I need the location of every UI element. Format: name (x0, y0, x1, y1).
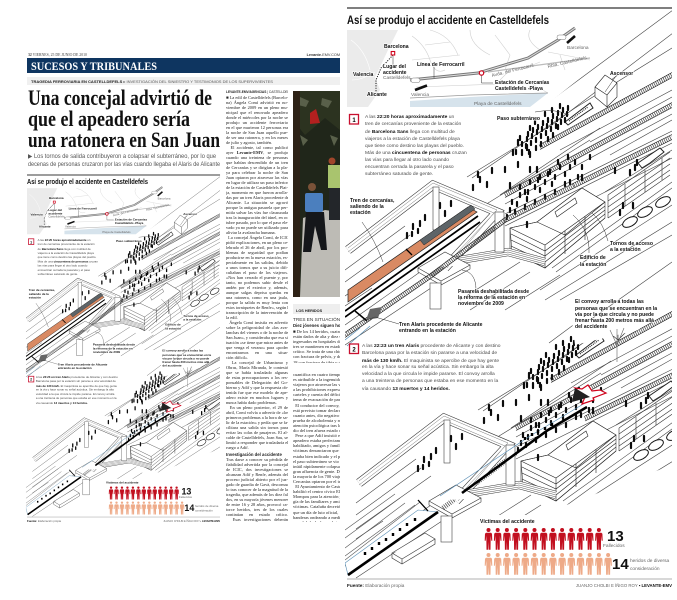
infographic, left small copy: Estación de Cercanías (115, 218, 147, 222)
article column 1: ayer Levante-EMV, se produjo (226, 150, 288, 155)
scene labels (350, 71, 653, 334)
infographic, left small copy: Tren de cercanías, (29, 288, 55, 292)
infographic, left small copy: velocidad a la que circula le impide pararse. El convoy arrolla (36, 392, 115, 396)
infographic, left small copy: Fuente: Elaboración propia (27, 519, 62, 523)
infographic, left small copy: accidente (48, 212, 63, 216)
infographic, left small copy: heridos de diversa (195, 504, 219, 508)
article column 1: donde el miércoles por la noche se (226, 115, 288, 120)
infographic, left small copy: encuentran cerrada la pasarela y el paso (38, 268, 91, 272)
article column 1: porque la salida es muy lenta con (226, 300, 288, 305)
step 1 text: que tiene como destino las playas del pueblo. (365, 143, 464, 149)
infographic, left small copy: de Barcelona Sans llega con multitud de (38, 247, 91, 251)
article column 1: tuación «se tiene que mirar antes de (226, 340, 288, 345)
infographic, left small copy: Lugar del (48, 208, 62, 212)
infographic, left small copy: entrando en la estación (58, 366, 92, 370)
infographic, left small copy: Tornos de acceso (183, 314, 209, 318)
headline: Una concejal advirtió de (28, 85, 212, 110)
headline: una ratonera en San Juan (28, 127, 220, 152)
article column 1: El accidente, tal como publicó (231, 145, 288, 150)
infographic, left small copy: noviembre de 2009 (93, 350, 120, 354)
infographic, left small copy: a la estación (183, 318, 201, 322)
article column 1: porque la antigua pasarela que per- (226, 205, 288, 210)
article column 1: nicipal que el renovado apeadero (226, 110, 288, 115)
sidebar: los heridos text (293, 317, 340, 363)
article column 1: tanto, no podemos subir desde el (226, 280, 288, 285)
infographic, left small copy: Pasarela deshabilitada desde (93, 343, 135, 347)
article column 1: que se había trasladado algunas (226, 370, 288, 375)
article column 1: La concejal de Urbanismo y (232, 360, 288, 365)
infographic, left small copy: Víctimas del accidente (106, 480, 139, 484)
infographic, left small copy: las vías para llegar al otro lado cuando (38, 264, 88, 268)
article column 1: Obras, María Miranda, le contestó (226, 365, 288, 370)
article column 1: lir de la estación» y pedía que se fa- (226, 420, 288, 425)
infographic, left small copy: Fallecidos (179, 495, 192, 499)
infographic, left small copy: la reforma de la estación en (93, 346, 133, 350)
article column 1: dos, en su mayoría jóvenes menores (226, 497, 288, 502)
article column 1: en lugar de utilizar un paso inferior (226, 180, 288, 185)
step 2 text: vía causando 13 muertos y 14 heridos. (362, 386, 450, 392)
article column 1: sobre la peligrosidad de «las ava- (226, 325, 288, 330)
section sub strip (27, 77, 340, 85)
callout: convoy: El convoy arrolla a todas las (575, 299, 644, 305)
street map labels: Estación de Cercanías (495, 80, 550, 86)
article column 1: torce heridos, tres de los cuales (226, 507, 288, 512)
photo: police officers at the station (293, 91, 340, 297)
newspaper name line: Levante-EMV.COM (307, 53, 340, 57)
source and credits: Fuente: Elaboración propia (347, 583, 405, 588)
infographic, left small copy: saliendo de la (29, 292, 49, 296)
step 2 text: A las 22:23 un tren Alaris procedente de Alicante y con destino (362, 343, 501, 349)
article column 2: el paso subterráneo se vio (293, 459, 339, 464)
infographic, left small copy: Playa de Castelldefels (102, 230, 131, 234)
scene labels: Paso subterráneo (497, 116, 540, 122)
article column 1: nunca había dado problemas. (226, 400, 277, 405)
street map labels: Rbla. Castelldefels (547, 55, 588, 70)
step 2 text: más de 130 km/h. El maquinista se apercibe de que hay gente (362, 358, 499, 364)
article column 1: pecialmente en las salidas, debido (226, 260, 288, 265)
infographic, left small copy: Rbla. Castelldefels (146, 202, 170, 212)
infographic, left small copy: 13 (181, 486, 191, 496)
article column 1: primeros problemas a la hora de sa- (226, 415, 288, 420)
locator map labels: accidente (383, 70, 407, 76)
article column 1: «Nos han cerrado el puente y, por (226, 275, 288, 280)
article column 1: viembre de 2009 en un pleno mu- (226, 105, 288, 110)
infographic, left small copy: 2 (30, 378, 32, 382)
scene labels: entrando en la estación (399, 328, 456, 334)
article column 1: ja, momento en que fueron arrolla- (226, 190, 288, 195)
newspaper page date line: 32 VIERNES, 25 DE JUNIO DE 2010 (28, 53, 87, 58)
scene labels: Pasarela deshabilitada desde (458, 289, 529, 295)
article column 1 (226, 90, 288, 522)
source and credits: JUANJO CHOLBI E ÍÑIGO ROY ▪ LEVANTE-EMV (576, 583, 672, 588)
article column 1: la edil. (226, 315, 238, 320)
street map labels: Castelldefels -Playa (495, 86, 543, 92)
street map labels: Playa de Castelldefels (474, 101, 522, 107)
article column 1: limitó a responder que trasladaría el (226, 440, 288, 445)
step 1 text: de Barcelona Sans llega con multitud de (365, 129, 455, 135)
infographic, left small copy: Tren Alaris procedente de Alicante (58, 362, 108, 366)
scene labels: Ascensor (610, 71, 633, 77)
scene labels: Edificio de (580, 255, 606, 261)
section banner (27, 58, 340, 73)
article column 1: ■ La edil de Castelldefels (Barcelo- (226, 95, 288, 100)
article column 1: de entre 16 y 28 años, provocó ca- (226, 502, 288, 507)
step 2 text: a una treintena de personas que estaba en ese momento en la (362, 378, 498, 384)
infographic, left small copy: Avda. del Ferrocarril (112, 207, 139, 217)
article column 1: lo tras conocer de la magnitud de la (226, 487, 288, 492)
infographic, left small copy: Valencia (31, 213, 43, 217)
infographic, left small copy: vía por la que circula y no puede (162, 356, 210, 360)
scene labels: Tren de cercanías, (350, 198, 395, 204)
infographic, left small copy: Ascensor (183, 212, 198, 216)
step 2 text: 2 (352, 348, 356, 354)
infographic, left small copy: Línea de Ferrocarril (69, 207, 97, 211)
sidebar strip: los heridos (293, 304, 340, 314)
article column 1: vado ya no puede ser utilizado para (226, 225, 288, 230)
graphic title, left copy: Así se produjo el accidente en Castelldefels (27, 179, 148, 186)
infographic, left small copy: Castelldefels (48, 215, 65, 219)
source and credits (347, 583, 672, 588)
scene labels: Tornos de acceso (610, 241, 653, 247)
victims legend: consideración (630, 566, 660, 572)
scene labels: noviembre de 2009 (458, 301, 504, 307)
street map labels: Valencia (411, 92, 429, 98)
article column 1: mitía salvar las vías fue clausurada (226, 210, 288, 215)
scene labels: Tren Alaris procedente de Alicante (399, 322, 483, 328)
callout: convoy: personas que se encuentran en la (575, 306, 657, 312)
victims legend (480, 519, 670, 573)
subheadline: decenas de personas cruzaron por las vías cuando llegaba el Alaris de Alicante (28, 161, 220, 168)
infographic, left small copy: tren de cercanías proveniente de la estación (38, 242, 95, 246)
step 1 text: tren de cercanías proveniente de la estación (365, 121, 462, 127)
article column 1: tras la inauguración del túnel, en oc- (226, 215, 288, 220)
victims legend: heridos de diversa (630, 558, 670, 564)
article column 1: encontrarnos en una situa- (226, 350, 288, 355)
article column 1: Esas investigaciones deberán (233, 517, 288, 522)
section sub strip: TRAGEDIA FERROVIARIA EN CASTELLDEFELS ▸ INVESTIGACIÓN DEL SINIESTRO Y TESTIMONIOS DE LOS SUPERVIVIENTES (31, 79, 273, 84)
article column 1: de la estación de Castelldefels Plat- (226, 185, 288, 190)
article column 1: que habían descendido de un tren (226, 160, 288, 165)
callout: convoy: vía por la que circula y no puede (575, 312, 654, 318)
infographic, left small copy: A las 22:23 un tren Alaris procedente de Alicante y con destino (36, 375, 118, 379)
article column 1: tubre pasado, por lo que el paso ele- (226, 220, 288, 225)
infographic, left small copy: Castelldefels -Playa (115, 221, 144, 225)
article column 1: En un pleno posterior, el 29 de (230, 405, 288, 410)
article column 1: fiabilidad advertida por la concejal (226, 462, 288, 467)
article column 1: de julio y agosto, también. (226, 140, 272, 145)
infographic, left small copy: Valencia (65, 225, 76, 229)
infographic, left small copy: a una treintena de personas que estaba en ese momento en la (36, 396, 117, 400)
street map labels: Línea de Ferrocarril (417, 62, 465, 68)
article column 2 (293, 372, 340, 522)
callout: convoy (575, 299, 657, 330)
article column 1: ción difícil». (226, 355, 248, 360)
step 1 text: subterráneo saturado de gente. (365, 171, 433, 177)
scene labels: saliendo de la (350, 204, 384, 210)
infographic, left small copy: 1 (30, 240, 32, 244)
article column 1: La concejal Ángela Comí, de ICIC, (228, 235, 288, 240)
infographic, left small copy: Más de una cincuentena de personas cruzan (38, 259, 98, 263)
scene labels: la reforma de la estación en (458, 295, 525, 301)
headline: que el apeadero sería (28, 106, 190, 131)
subheadline: ▶ Los tornos de salida contribuyeron a colapsar el subterráneo, por lo que (28, 153, 217, 160)
article column 1: de ICIC, dos investigaciones se (226, 467, 288, 472)
article column 1: en el que murieron 12 personas era (226, 125, 288, 130)
step 1 text: viajeros a la estación de Castelldefels playa (365, 136, 460, 142)
scene labels: estación (350, 210, 371, 216)
infographic, left small copy: estación (29, 295, 41, 299)
infographic, left small copy: Alicante (39, 225, 51, 229)
article column 1: de estas preocupaciones a los res- (226, 375, 288, 380)
article column 1: que venga el verano» para «poder (226, 345, 288, 350)
locator map labels (353, 44, 411, 98)
scene labels: la estación (580, 262, 606, 268)
infographic, left small copy: vía causando 13 muertos y 14 heridos. (36, 401, 88, 405)
step 2 text: Barcelona pasa por la estación sin pararse a una velocidad de (362, 350, 497, 356)
article column 1: aliviar la avalancha humana. (226, 230, 276, 235)
step 2 text: velocidad a la que circula le impide pararse. El convoy arrolla (362, 371, 495, 377)
victims legend: 14 (612, 556, 629, 573)
locator map labels: Valencia (353, 72, 374, 78)
street map labels: Avda. del Ferrocarril (491, 63, 534, 79)
article column 1: ya para celebrar la noche de San (226, 170, 288, 175)
step 1 text: 1 (352, 118, 356, 124)
graphic title, right: Así se produjo el accidente en Castelldefels (347, 14, 549, 27)
article column 1: a unos tornos que a su juicio difi- (226, 265, 288, 270)
article column 1: Investigación del accidente (226, 452, 282, 457)
article column 1: das por un tren Alaris procedente de (226, 195, 288, 200)
step 2 text: en la vía y hace sonar su señal acústica. Sin embargo la alta (362, 364, 494, 370)
step 1 text: encuentran cerrada la pasarela y el paso (365, 164, 454, 170)
locator map labels: Barcelona (384, 44, 409, 50)
infographic, left small copy: que tiene como destino las playas del pueblo. (38, 255, 96, 259)
subheadline (28, 153, 220, 168)
article column 2: víctimas. Cataluña decretó (293, 504, 340, 509)
callout: convoy: del accidente (575, 324, 607, 330)
victims legend: Víctimas del accidente (480, 519, 535, 525)
article column 1: tenida fue que ese modelo de ape- (226, 390, 288, 395)
article column 1: produjo un accidente ferroviario (226, 120, 288, 125)
infographic, left small copy: Barcelona (158, 197, 171, 201)
step 1 text (352, 114, 467, 177)
article column 1: Juan optaron por atravesar las vías (226, 175, 288, 180)
infographic, left small copy: del accidente (162, 364, 182, 368)
article column 1: producirse en la nueva estación, es- (226, 255, 288, 260)
article column 1: la noche de San Juan aquello pue- (226, 130, 288, 135)
infographic art, right large version (345, 8, 677, 579)
article column 2: atención psicológica tras lo (293, 423, 340, 428)
infographic, left small copy: personas que se encuentran en la (162, 353, 211, 357)
infographic, left small copy: Barcelona (49, 196, 64, 200)
infographic, left small copy: Edificio de (165, 322, 181, 326)
infographic, left small copy: Barcelona pasa por la estación sin pararse a una velocidad de (36, 379, 116, 383)
article column 2: habilitó el centro cívico El (293, 489, 340, 494)
article column 1: Alicante. La situación se agravó (226, 200, 288, 205)
article column 1: adero existe en muchos lugares y (226, 395, 288, 400)
infographic, left small copy: JUANJO CHOLBI E ÍÑIGO ROY ▪ LEVANTE-EMV (163, 518, 220, 523)
article column 1: pidió explicaciones, en un pleno ce- (226, 240, 288, 245)
article column 1: continúan en estado crítico. (226, 512, 288, 517)
article column 1: bierno y Adif y que la respuesta ob- (226, 385, 288, 390)
article column 1: San Juan», y consideraba que esa si- (226, 335, 288, 340)
step 1 text: A las 22:20 horas aproximadamente un (365, 114, 454, 120)
article column 1: proceso judicial abierto por el juz- (226, 477, 288, 482)
locator map labels: Alicante (367, 92, 387, 98)
infographic, left small copy (26, 175, 227, 523)
locator map labels: Lugar del (383, 64, 407, 70)
infographic, left small copy: la estación (165, 327, 181, 331)
article column 1: ruego a Adif. (226, 445, 249, 450)
article column 1: lebrado el 26 de abril, por los pro- (226, 245, 288, 250)
article column 1: evitar las colas de pasajeros. El al- (226, 430, 288, 435)
article column 1: una ratonera, como en una jaula, (226, 295, 288, 300)
article column 1: Ángela Comí insistía en advertir (229, 320, 288, 325)
article column 1: cilitara una salida sin tornos para (226, 425, 288, 430)
article column 1: ponsables de Delegación del Go- (226, 380, 288, 385)
infographic, left small copy: A las 22:20 horas aproximadamente un (38, 238, 91, 242)
infographic, left small copy: en la vía y hace sonar su señal acústica. Sin embargo la alta (36, 388, 114, 392)
article column 1: lanchas del viernes o de la noche de (226, 330, 288, 335)
article column 1: abril, Comí volvía a advertir de «los (226, 410, 288, 415)
infographic, left small copy: Paso subterráneo (116, 239, 142, 243)
article column 1: cultaban el paso de los viajeros. (226, 270, 288, 275)
step 2 text (352, 343, 501, 392)
headline (28, 85, 220, 152)
infographic, left small copy: 14 (184, 503, 194, 513)
infographic, left small copy: subterráneo saturado de gente. (38, 272, 78, 276)
infographic, left small copy: viajeros a la estación de Castelldefels playa (38, 251, 94, 255)
street map labels: Barcelona (567, 45, 589, 51)
locator map labels: Castelldefels (383, 75, 411, 81)
article column 1: calde de Castelldefels, Joan Sau, se (226, 435, 288, 440)
article column 2: que un día de luto oficial, (293, 510, 338, 515)
infographic, left small copy: El convoy arrolla a todas las (162, 349, 204, 353)
article column 1: de Cercanías y se dirigían a la pla- (226, 165, 288, 170)
step 1 text: las vías para llegar al otro lado cuando (365, 157, 449, 163)
article column 2: El conductor del convoy, (295, 403, 340, 408)
article column 1: andén por el exterior y, además, (226, 285, 288, 290)
street map labels (411, 45, 589, 107)
infographic, left small copy: frenar hasta 200 metros más allá (162, 360, 210, 364)
victims legend: Fallecidos (603, 543, 625, 549)
article column 1: alcanzan Adif y Renfe, además del (226, 472, 288, 477)
article column 1: Tras darse a conocer su pérdida de (226, 457, 288, 462)
article column 1: blemas de seguridad que podían (226, 250, 288, 255)
scene labels: a la estación (610, 247, 641, 253)
article column 1: cuando una treintena de personas (226, 155, 288, 160)
sidebar strip: los heridos: LOS HERIDOS (296, 309, 323, 313)
victims legend: 13 (607, 528, 624, 545)
article column 1: de ser una ratonera, y en los meses (226, 135, 288, 140)
step 1 text: Más de una cincuentena de personas cruzan (365, 150, 467, 156)
article column 1: na) Ángela Comí advirtió en no- (226, 100, 288, 105)
infographic, left small copy: consideración (195, 509, 213, 513)
section banner: SUCESOS Y TRIBUNALES (31, 61, 157, 73)
callout: convoy: frenar hasta 200 metros más allá (575, 318, 654, 324)
infographic, left small copy: más de 130 km/h. El maquinista se apercibe de que hay gente (36, 384, 117, 388)
article column 1: transcripción de la intervención de (226, 310, 288, 315)
article column 1: aunque salgas deprisa quedas en (226, 290, 288, 295)
